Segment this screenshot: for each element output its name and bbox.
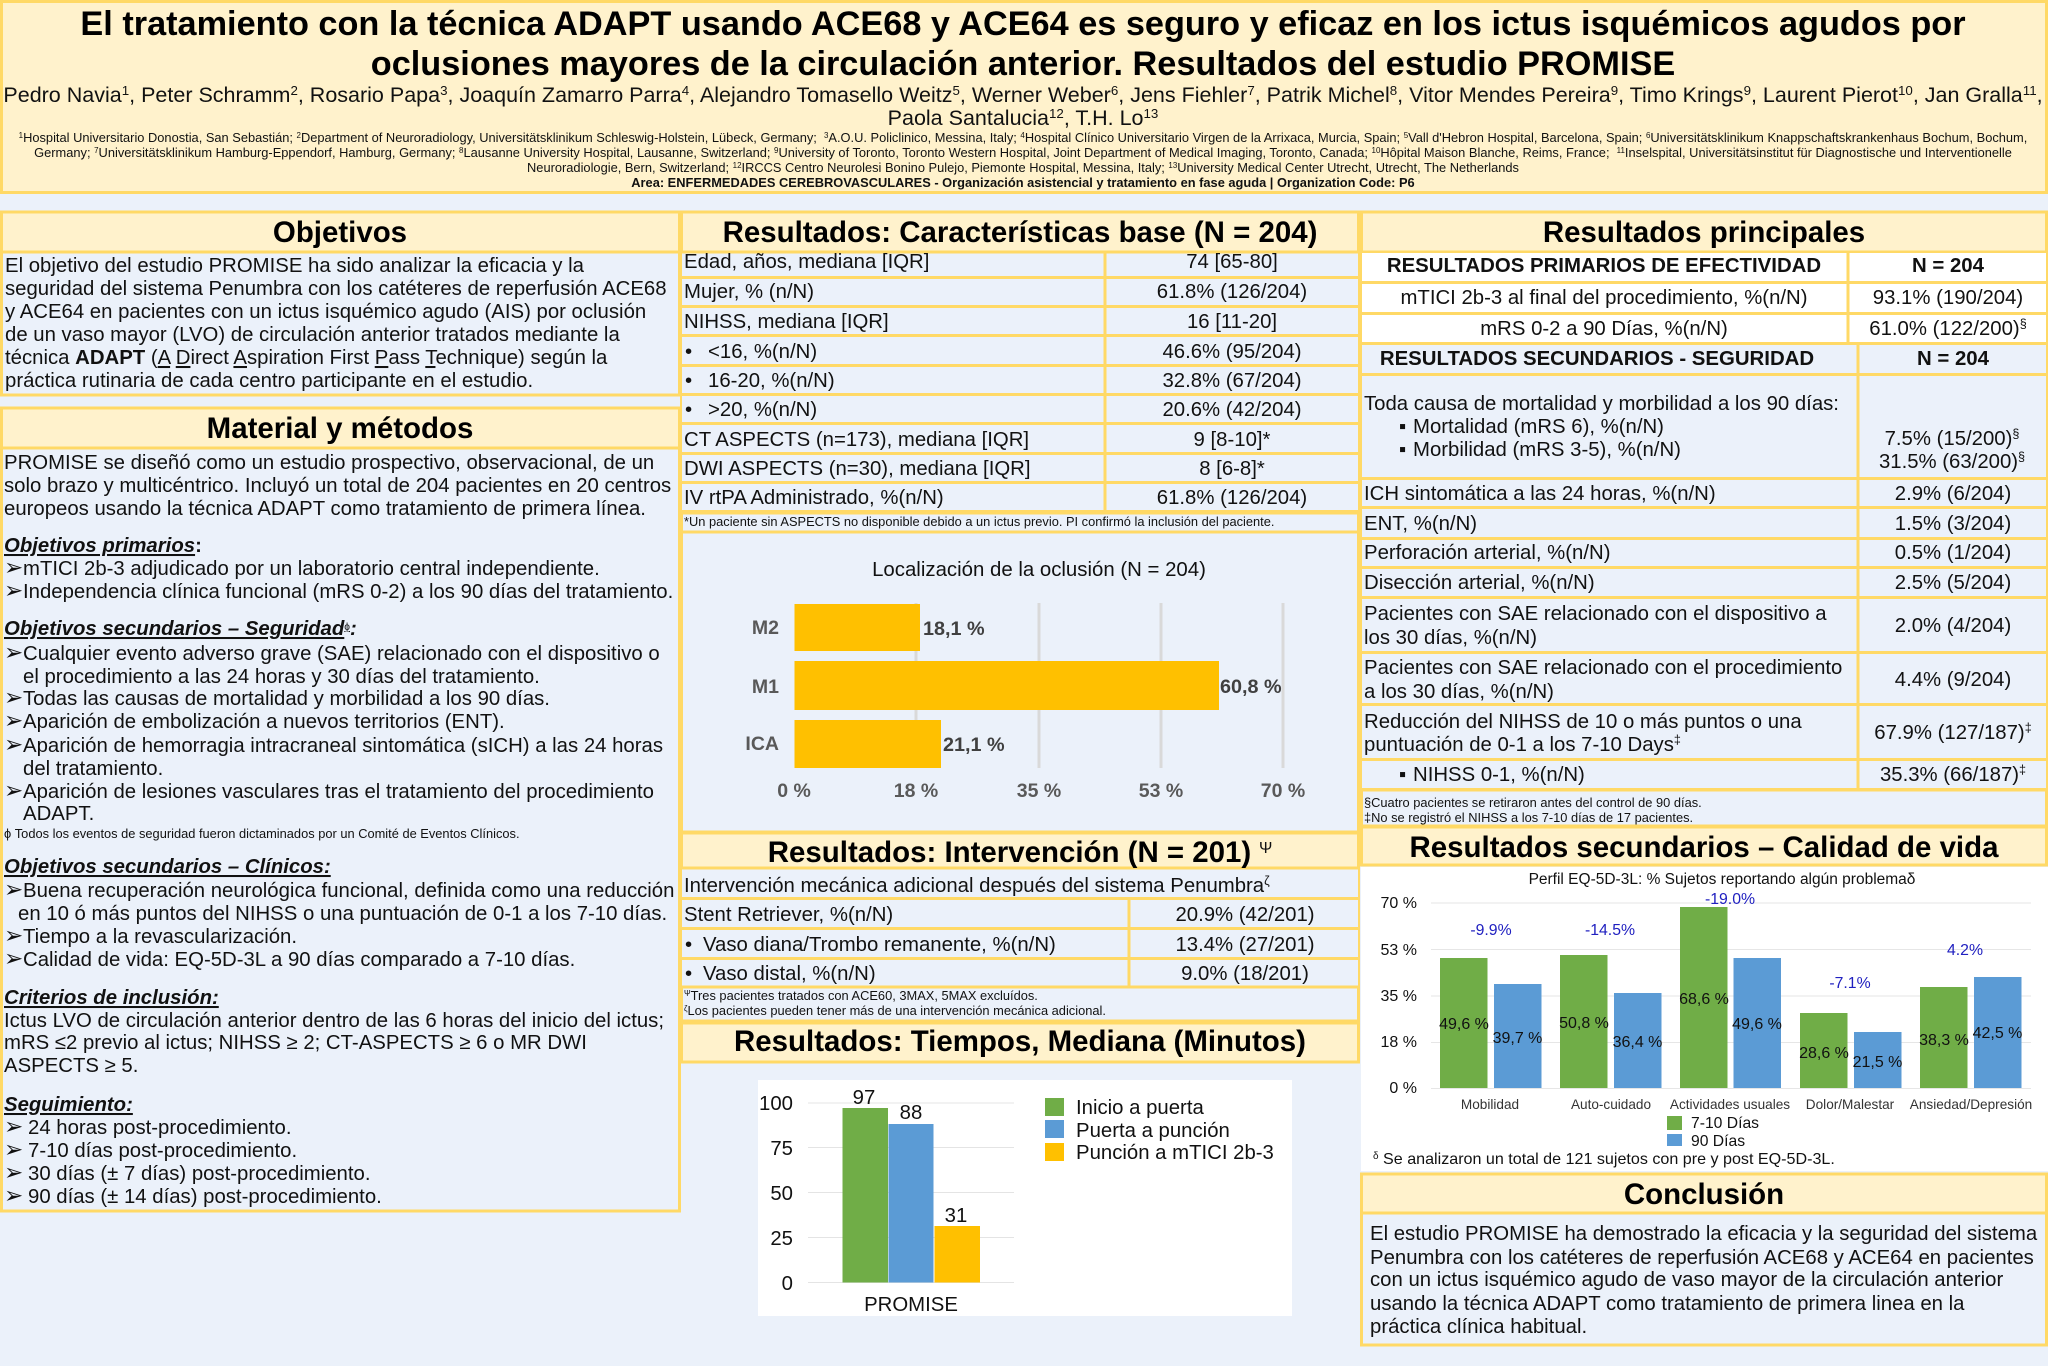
panel: conclusión (1362, 1174, 2046, 1345)
heading: conclusión (1362, 1174, 2046, 1213)
table: características base: IV rtPA Administrado, %(n/N) (684, 487, 944, 509)
table: resultados secundarios seguridad: 2.9% (6/204) (1895, 483, 2011, 505)
heading: conclusión: Conclusión (1624, 1178, 1784, 1211)
affiliations: Neuroradiologie, Bern, Switzerland; 12IRCCS Centro Neurolesi Bonino Pulejo, Piemonte Hospital, Messina, Italy; 13University Medical Center Utrecht, Utrecht, The Netherlands (527, 160, 1519, 175)
table: resultados secundarios seguridad: ICH sintomática a las 24 horas, %(n/N) (1364, 483, 1716, 505)
text block: objetivos secundarios seguridad: Aparición de lesiones vasculares tras el tratamiento del procedimiento (23, 781, 654, 803)
category labels: Mobilidad (1461, 1097, 1519, 1112)
table: características base: DWI ASPECTS (n=30), mediana [IQR] (684, 458, 1031, 480)
table: resultados secundarios seguridad: 35.3% (66/187)‡ (1880, 763, 2026, 786)
table: resultados secundarios seguridad (1360, 252, 2048, 827)
bar values: 49,6 % (1439, 1016, 1489, 1033)
text block: objetivos secundarios seguridad: el procedimiento a las 24 horas y 30 días del tratamiento. (23, 666, 540, 688)
bars: 90 días (1494, 958, 2022, 1088)
table: características base: 16-20, %(n/N) (708, 370, 835, 392)
change percentages: -9.9% (1470, 922, 1512, 939)
footnote: eq-5d-3l: δ Se analizaron un total de 121 sujetos con pre y post EQ-5D-3L. (1373, 1150, 1835, 1168)
legend: Punción a mTICI 2b-3 (1076, 1142, 1274, 1164)
text block: seguimiento: 90 días (± 14 días) post-procedimiento. (28, 1186, 382, 1208)
bar values: 28,6 % (1799, 1045, 1849, 1062)
text block: objetivos primarios (4, 535, 673, 603)
text block: seguimiento: ➢ (4, 1136, 23, 1162)
affiliations (19, 130, 2027, 175)
category labels: Ansiedad/Depresión (1910, 1097, 2032, 1112)
title: El tratamiento con la técnica ADAPT usando ACE68 y ACE64 es seguro y eficaz en los ictus isquémicos agudos por (80, 5, 1966, 43)
table: intervención: • (685, 963, 692, 985)
bar values: 68,6 % (1679, 991, 1729, 1008)
table: intervención: Intervención mecánica adicional después del sistema Penumbraζ (684, 874, 1270, 897)
text block: objetivos: y ACE64 en pacientes con un ictus isquémico agudo (AIS) por oclusión (5, 301, 646, 323)
bars (842, 1108, 980, 1282)
bars (794, 604, 1219, 768)
change percentages (1470, 891, 1983, 992)
bar chart: tiempos (758, 1080, 1292, 1316)
footnotes: intervención (682, 987, 1358, 1021)
table: características base: NIHSS, mediana [IQR] (684, 311, 889, 333)
table: intervención: Stent Retriever, %(n/N) (684, 904, 893, 926)
category labels: M2 (752, 617, 779, 639)
table: resultados secundarios seguridad: ENT, %(n/N) (1364, 513, 1477, 535)
text block: criterios de inclusión: mRS ≤2 previo al ictus; NIHSS ≥ 2; CT-ASPECTS ≥ 6 o MR DWI (4, 1032, 587, 1054)
text block: objetivos secundarios clínicos: en 10 ó más puntos del NIHSS o una puntuación de 0-1 a los 7-10 días. (18, 903, 667, 925)
table: resultados secundarios seguridad: a los 30 días, %(n/N) (1364, 681, 1554, 703)
text block: objetivos secundarios seguridad: ➢ (4, 777, 23, 803)
y axis labels: 53 % (1381, 942, 1417, 959)
category labels: Auto-cuidado (1571, 1097, 1651, 1112)
table: resultados secundarios seguridad: los 30 días, %(n/N) (1364, 627, 1537, 649)
value labels: 60,8 % (1220, 676, 1282, 698)
x axis labels (777, 780, 1305, 802)
x axis labels: 53 % (1139, 780, 1183, 802)
text block: objetivos secundarios clínicos: Calidad de vida: EQ-5D-3L a 90 días comparado a 7-10 días. (23, 949, 575, 971)
text block: objetivos secundarios seguridad: ➢ (4, 731, 23, 757)
panel: objetivos (2, 212, 680, 395)
table: intervención: 20.9% (42/201) (1175, 904, 1315, 926)
heading: resultados principales: Resultados principales (1543, 216, 1865, 249)
bar chart: calidad de vida (1361, 867, 2048, 1171)
y axis labels: 35 % (1381, 988, 1417, 1005)
y axis labels: 100 (759, 1093, 793, 1115)
y axis labels: 0 (782, 1273, 793, 1295)
bar values: 88 (900, 1102, 922, 1124)
x axis labels: 70 % (1261, 780, 1305, 802)
text block: objetivos: técnica ADAPT (A Direct Aspiration First Pass Technique) según la (5, 347, 608, 369)
heading: material y métodos (2, 408, 680, 448)
table: resultados secundarios seguridad: 67.9% (127/187)‡ (1874, 721, 2032, 744)
table: resultados primarios de efectividad: N = 204 (1912, 255, 1985, 277)
text block: objetivos secundarios seguridad: Aparición de embolización a nuevos territorios (ENT). (23, 711, 505, 733)
text block: objetivos secundarios clínicos: Objetivos secundarios – Clínicos: (4, 856, 331, 878)
legend (1045, 1097, 1274, 1164)
text block: objetivos secundarios seguridad: del tratamiento. (23, 758, 163, 780)
footnote: aspects: *Un paciente sin ASPECTS no disponible debido a un ictus previo. PI confirmó la inclusión del paciente. (684, 514, 1274, 529)
affiliations: Germany; 7Universitätsklinikum Hamburg-Eppendorf, Hamburg, Germany; 8Lausanne University Hospital, Lausanne, Switzerland; 9University of Toronto, Toronto Western Hospital, Joint Department of Medical Imaging, Toronto, Canada; 10Hôpital Maison Blanche, Reims, France; 11Inselspital, Universitätsinstitut für Diagnostische und Interventionelle (34, 145, 2012, 160)
heading: tiempos: Resultados: Tiempos, Mediana (Minutos) (734, 1025, 1306, 1058)
text block: objetivos secundarios seguridad: Cualquier evento adverso grave (SAE) relacionado con el dispositivo o (23, 643, 660, 665)
bar values: 97 (853, 1087, 875, 1109)
table: características base: 74 [65-80] (1186, 251, 1278, 273)
text block: objetivos secundarios seguridad: ADAPT. (23, 803, 94, 825)
table: características base: • (685, 341, 692, 363)
table: resultados secundarios seguridad: N = 204 (1917, 348, 1990, 370)
y axis labels: 75 (770, 1138, 793, 1160)
heading: objetivos (2, 212, 680, 252)
text block: conclusión: usando la técnica ADAPT como tratamiento de primera linea en la (1370, 1293, 1965, 1315)
y axis labels: 25 (770, 1228, 793, 1250)
panel: intervención (680, 833, 1360, 1021)
x axis labels: 18 % (894, 780, 938, 802)
text block: objetivos secundarios seguridad: ϕ Todos los eventos de seguridad fueron dictaminados por un Comité de Eventos Clínicos. (4, 826, 520, 841)
footnote: aspects (682, 513, 1358, 532)
table: características base: 16 [11-20] (1187, 311, 1277, 333)
table: resultados secundarios seguridad: Toda causa de mortalidad y morbilidad a los 90 días: (1364, 393, 1839, 415)
text block: criterios de inclusión: Criterios de inclusión: (4, 987, 219, 1009)
x axis labels: 0 % (777, 780, 811, 802)
text block: objetivos secundarios clínicos: ➢ (4, 945, 23, 971)
text block: conclusión: práctica clínica habitual. (1370, 1316, 1587, 1338)
category labels: Dolor/Malestar (1806, 1097, 1895, 1112)
text block: objetivos secundarios seguridad: Aparición de hemorragia intracraneal sintomática (sICH) a las 24 horas (23, 735, 663, 757)
category labels: M1 (752, 676, 779, 698)
y axis labels: 50 (770, 1183, 793, 1205)
change percentages: 4.2% (1947, 942, 1983, 959)
table: resultados primarios de efectividad (1360, 252, 2048, 345)
text block: objetivos secundarios clínicos: ➢ (4, 876, 23, 902)
table: intervención: 9.0% (18/201) (1181, 963, 1309, 985)
text block: seguimiento: 7-10 días post-procedimiento. (28, 1140, 297, 1162)
text block: conclusión: con un ictus isquémico agudo de vaso mayor de la circulación anterior (1370, 1269, 2003, 1291)
table: resultados primarios de efectividad: 61.0% (122/200)§ (1869, 317, 2027, 340)
text block: objetivos secundarios clínicos: Tiempo a la revascularización. (23, 926, 297, 948)
table: características base: 46.6% (95/204) (1162, 341, 1302, 363)
bar values (853, 1087, 967, 1227)
y axis labels (1381, 895, 1417, 1097)
text block: objetivos (5, 255, 667, 392)
table: características base: Mujer, % (n/N) (684, 281, 814, 303)
table: resultados secundarios seguridad: 2.5% (5/204) (1895, 572, 2011, 594)
table: resultados primarios de efectividad: 93.1% (190/204) (1873, 287, 2023, 309)
x axis labels: 35 % (1017, 780, 1061, 802)
table: resultados secundarios seguridad: 1.5% (3/204) (1895, 513, 2011, 535)
text block: seguimiento: 30 días (± 7 días) post-procedimiento. (28, 1163, 370, 1185)
chart title: Perfil EQ-5D-3L: % Sujetos reportando algún problemaδ (1529, 871, 1915, 888)
panel: resultados principales (1360, 212, 2048, 827)
table: resultados secundarios seguridad: ▪ (1399, 416, 1406, 438)
table: resultados secundarios seguridad: Morbilidad (mRS 3-5), %(n/N) (1413, 439, 1681, 461)
table: resultados secundarios seguridad: Reducción del NIHSS de 10 o más puntos o una (1364, 711, 1802, 733)
change percentages: -7.1% (1829, 975, 1871, 992)
text block: diseño del estudio: solo brazo y multicéntrico. Incluyó un total de 204 pacientes en 20 centros (4, 475, 671, 497)
table: características base: Edad, años, mediana [IQR] (684, 251, 929, 273)
table: resultados secundarios seguridad: 31.5% (63/200)§ (1879, 450, 2025, 473)
text block: objetivos secundarios seguridad (4, 618, 663, 841)
table: características base: 20.6% (42/204) (1162, 399, 1302, 421)
text block: criterios de inclusión: Ictus LVO de circulación anterior dentro de las 6 horas del inicio del ictus; (4, 1010, 664, 1032)
y axis labels: 0 % (1389, 1080, 1417, 1097)
text block: objetivos primarios: Independencia clínica funcional (mRS 0-2) a los 90 días del tratamiento. (23, 581, 673, 603)
area and organization code: Area: ENFERMEDADES CEREBROVASCULARES - Organización asistencial y tratamiento en fase aguda | Organization Code: P6 (631, 175, 1415, 190)
heading: objetivos: Objetivos (273, 216, 407, 249)
text block: objetivos secundarios clínicos: ➢ (4, 922, 23, 948)
y axis labels: 70 % (1381, 895, 1417, 912)
category labels: ICA (745, 733, 779, 755)
table: resultados secundarios seguridad: RESULTADOS SECUNDARIOS - SEGURIDAD (1380, 348, 1814, 370)
text block: seguimiento: 24 horas post-procedimiento. (28, 1117, 292, 1139)
text block: objetivos secundarios clínicos (4, 856, 674, 971)
authors: Pedro Navia1, Peter Schramm2, Rosario Papa3, Joaquín Zamarro Parra4, Alejandro Tomasello Weitz5, Werner Weber6, Jens Fiehler7, Patrik Michel8, Vitor Mendes Pereira9, Timo Krings9, Laurent Pierot10, Jan Gralla11, (3, 82, 2043, 107)
text block: objetivos secundarios seguridad: ➢ (4, 707, 23, 733)
legend (1667, 1115, 1759, 1150)
x axis label: PROMISE (864, 1294, 958, 1316)
table: resultados secundarios seguridad: 0.5% (1/204) (1895, 542, 2011, 564)
footnotes: intervención: ΨTres pacientes tratados con ACE60, 3MAX, 5MAX excluídos. (684, 988, 1038, 1003)
text block: seguimiento (4, 1094, 382, 1208)
table: intervención: • (685, 934, 692, 956)
header banner (2, 2, 2046, 192)
text block: diseño del estudio (4, 452, 671, 520)
heading: características base: Resultados: Características base (N = 204) (723, 216, 1317, 249)
value labels: 21,1 % (943, 734, 1005, 756)
table: características base: 61.8% (126/204) (1157, 281, 1307, 303)
text block: conclusión (1370, 1223, 2038, 1338)
heading: material y métodos: Material y métodos (207, 412, 473, 445)
category labels (745, 617, 779, 755)
table: características base: 32.8% (67/204) (1162, 370, 1302, 392)
table: resultados secundarios seguridad: Pacientes con SAE relacionado con el procedimiento (1364, 657, 1842, 679)
table: resultados secundarios seguridad: 2.0% (4/204) (1895, 615, 2011, 637)
legend: Puerta a punción (1076, 1120, 1230, 1142)
text block: objetivos: seguridad del sistema Penumbra con los catéteres de reperfusión ACE68 (5, 278, 667, 300)
panel: características base (680, 212, 1360, 532)
y axis labels: 18 % (1381, 1034, 1417, 1051)
text block: criterios de inclusión (4, 987, 664, 1077)
authors (3, 82, 2043, 130)
bars: 7-10 días (1440, 907, 1968, 1088)
text block: objetivos primarios: Objetivos primarios: (4, 535, 202, 557)
text block: objetivos secundarios seguridad: Todas las causas de mortalidad y morbilidad a los 90 días. (23, 688, 550, 710)
panel: material y métodos (2, 408, 680, 1211)
footnotes: resultados principales: §Cuatro pacientes se retiraron antes del control de 90 días. (1364, 795, 1702, 810)
table: resultados secundarios seguridad: puntuación de 0-1 a los 7-10 Days‡ (1364, 733, 1681, 756)
table: resultados secundarios seguridad: 7.5% (15/200)§ (1885, 427, 2019, 450)
heading: intervención (682, 833, 1358, 869)
table: características base: 8 [6-8]* (1199, 458, 1265, 480)
change percentages: -19.0% (1705, 891, 1755, 908)
table: resultados secundarios seguridad: Disección arterial, %(n/N) (1364, 572, 1595, 594)
table: intervención: 13.4% (27/201) (1175, 934, 1315, 956)
table: resultados primarios de efectividad: RESULTADOS PRIMARIOS DE EFECTIVIDAD (1387, 255, 1821, 277)
text block: objetivos secundarios seguridad: Objetivos secundarios – Seguridadϕ: (4, 618, 357, 640)
table: intervención: Vaso diana/Trombo remanente, %(n/N) (703, 934, 1056, 956)
title (80, 5, 1966, 83)
bar chart: localización de la oclusión (682, 532, 1358, 832)
table: resultados secundarios seguridad: ▪ (1399, 764, 1406, 786)
footnotes: intervención: ζLos pacientes pueden tener más de una intervención mecánica adicional. (684, 1003, 1106, 1018)
bar values: 31 (945, 1205, 967, 1227)
table: características base: 61.8% (126/204) (1157, 487, 1307, 509)
bar values: 50,8 % (1559, 1015, 1609, 1032)
category labels (1461, 1097, 2032, 1112)
heading: calidad de vida: Resultados secundarios – Calidad de vida (1410, 831, 1999, 864)
text block: objetivos secundarios seguridad: ➢ (4, 639, 23, 665)
table: resultados primarios de efectividad: mTICI 2b-3 al final del procedimiento, %(n/N) (1400, 287, 1808, 309)
bar values: 36,4 % (1613, 1034, 1662, 1051)
footnotes: resultados principales (1362, 790, 2046, 826)
heading: intervención: Resultados: Intervención (N = 201) (768, 836, 1251, 869)
value labels: 18,1 % (923, 618, 985, 640)
text block: objetivos primarios: mTICI 2b-3 adjudicado por un laboratorio central independiente. (23, 558, 600, 580)
text block: diseño del estudio: europeos usando la técnica ADAPT como tratamiento de primera línea. (4, 498, 646, 520)
text block: conclusión: El estudio PROMISE ha demostrado la eficacia y la seguridad del sistema (1370, 1223, 2038, 1245)
legend: Inicio a puerta (1076, 1097, 1204, 1119)
chart title: Localización de la oclusión (N = 204) (872, 559, 1206, 581)
title: oclusiones mayores de la circulación anterior. Resultados del estudio PROMISE (371, 45, 1675, 83)
text block: objetivos: El objetivo del estudio PROMISE ha sido analizar la eficacia y la (5, 255, 585, 277)
table: resultados secundarios seguridad: Mortalidad (mRS 6), %(n/N) (1413, 416, 1664, 438)
text block: objetivos: de un vaso mayor (LVO) de circulación anterior tratados mediante la (5, 324, 620, 346)
bar values (1439, 991, 2022, 1071)
text block: seguimiento: ➢ (4, 1182, 23, 1208)
text block: criterios de inclusión: ASPECTS ≥ 5. (4, 1055, 138, 1077)
text block: seguimiento: Seguimiento: (4, 1094, 133, 1116)
table: características base: • (685, 399, 692, 421)
affiliations: 1Hospital Universitario Donostia, San Sebastián; 2Department of Neuroradiology, Universitätsklinikum Schleswig-Holstein, Lübeck, Germany; 3A.O.U. Policlinico, Messina, Italy; 4Hospital Clínico Universitario Virgen de la Arrixaca, Murcia, Spain; 5Vall d'Hebron Hospital, Barcelona, Spain; 6Universitätsklinikum Knappschaftskrankenhaus Bochum, Bochum, (19, 130, 2027, 145)
authors: Paola Santalucia12, T.H. Lo13 (888, 106, 1158, 130)
footnotes: resultados principales: ‡No se registró el NIHSS a los 7-10 días de 17 pacientes. (1364, 810, 1693, 825)
legend: 7-10 Días (1691, 1115, 1759, 1132)
bar values: 49,6 % (1732, 1016, 1782, 1033)
y axis labels (759, 1093, 793, 1295)
text block: objetivos secundarios seguridad: ➢ (4, 684, 23, 710)
bar values: 42,5 % (1973, 1025, 2022, 1042)
text block: diseño del estudio: PROMISE se diseñó como un estudio prospectivo, observacional, de un (4, 452, 654, 474)
heading: resultados principales (1362, 212, 2046, 252)
bar values: 39,7 % (1493, 1030, 1542, 1047)
bar values: 38,3 % (1919, 1032, 1969, 1049)
table: características base: • (685, 370, 692, 392)
table: resultados secundarios seguridad: NIHSS 0-1, %(n/N) (1413, 764, 1585, 786)
text block: objetivos primarios: ➢ (4, 577, 23, 603)
table: características base: CT ASPECTS (n=173), mediana [IQR] (684, 429, 1029, 451)
text block: objetivos: práctica rutinaria de cada centro participante en el estudio. (5, 370, 533, 392)
table: características base (680, 251, 1360, 532)
table: resultados secundarios seguridad: Pacientes con SAE relacionado con el dispositivo a (1364, 603, 1827, 625)
legend: 90 Días (1691, 1133, 1745, 1150)
table: resultados secundarios seguridad: 4.4% (9/204) (1895, 669, 2011, 691)
value labels (923, 618, 1282, 756)
text block: objetivos primarios: ➢ (4, 554, 23, 580)
heading: intervención: Ψ (1259, 840, 1272, 857)
bar values: 21,5 % (1853, 1054, 1902, 1071)
table: resultados primarios de efectividad: mRS 0-2 a 90 Días, %(n/N) (1480, 318, 1728, 340)
table: características base: >20, %(n/N) (708, 399, 817, 421)
text block: conclusión: Penumbra con los catéteres de reperfusión ACE68 y ACE64 en pacientes (1370, 1247, 2034, 1269)
category labels: Actividades usuales (1670, 1097, 1790, 1112)
text block: seguimiento: ➢ (4, 1113, 23, 1139)
change percentages: -14.5% (1585, 922, 1635, 939)
table: características base: 9 [8-10]* (1194, 429, 1271, 451)
table: resultados secundarios seguridad: Perforación arterial, %(n/N) (1364, 542, 1610, 564)
text block: seguimiento: ➢ (4, 1159, 23, 1185)
table: resultados secundarios seguridad: ▪ (1399, 439, 1406, 461)
table: intervención (680, 868, 1360, 986)
table: intervención: Vaso distal, %(n/N) (703, 963, 876, 985)
text block: objetivos secundarios clínicos: Buena recuperación neurológica funcional, definida como una reducción (23, 880, 674, 902)
table: características base: <16, %(n/N) (708, 341, 817, 363)
